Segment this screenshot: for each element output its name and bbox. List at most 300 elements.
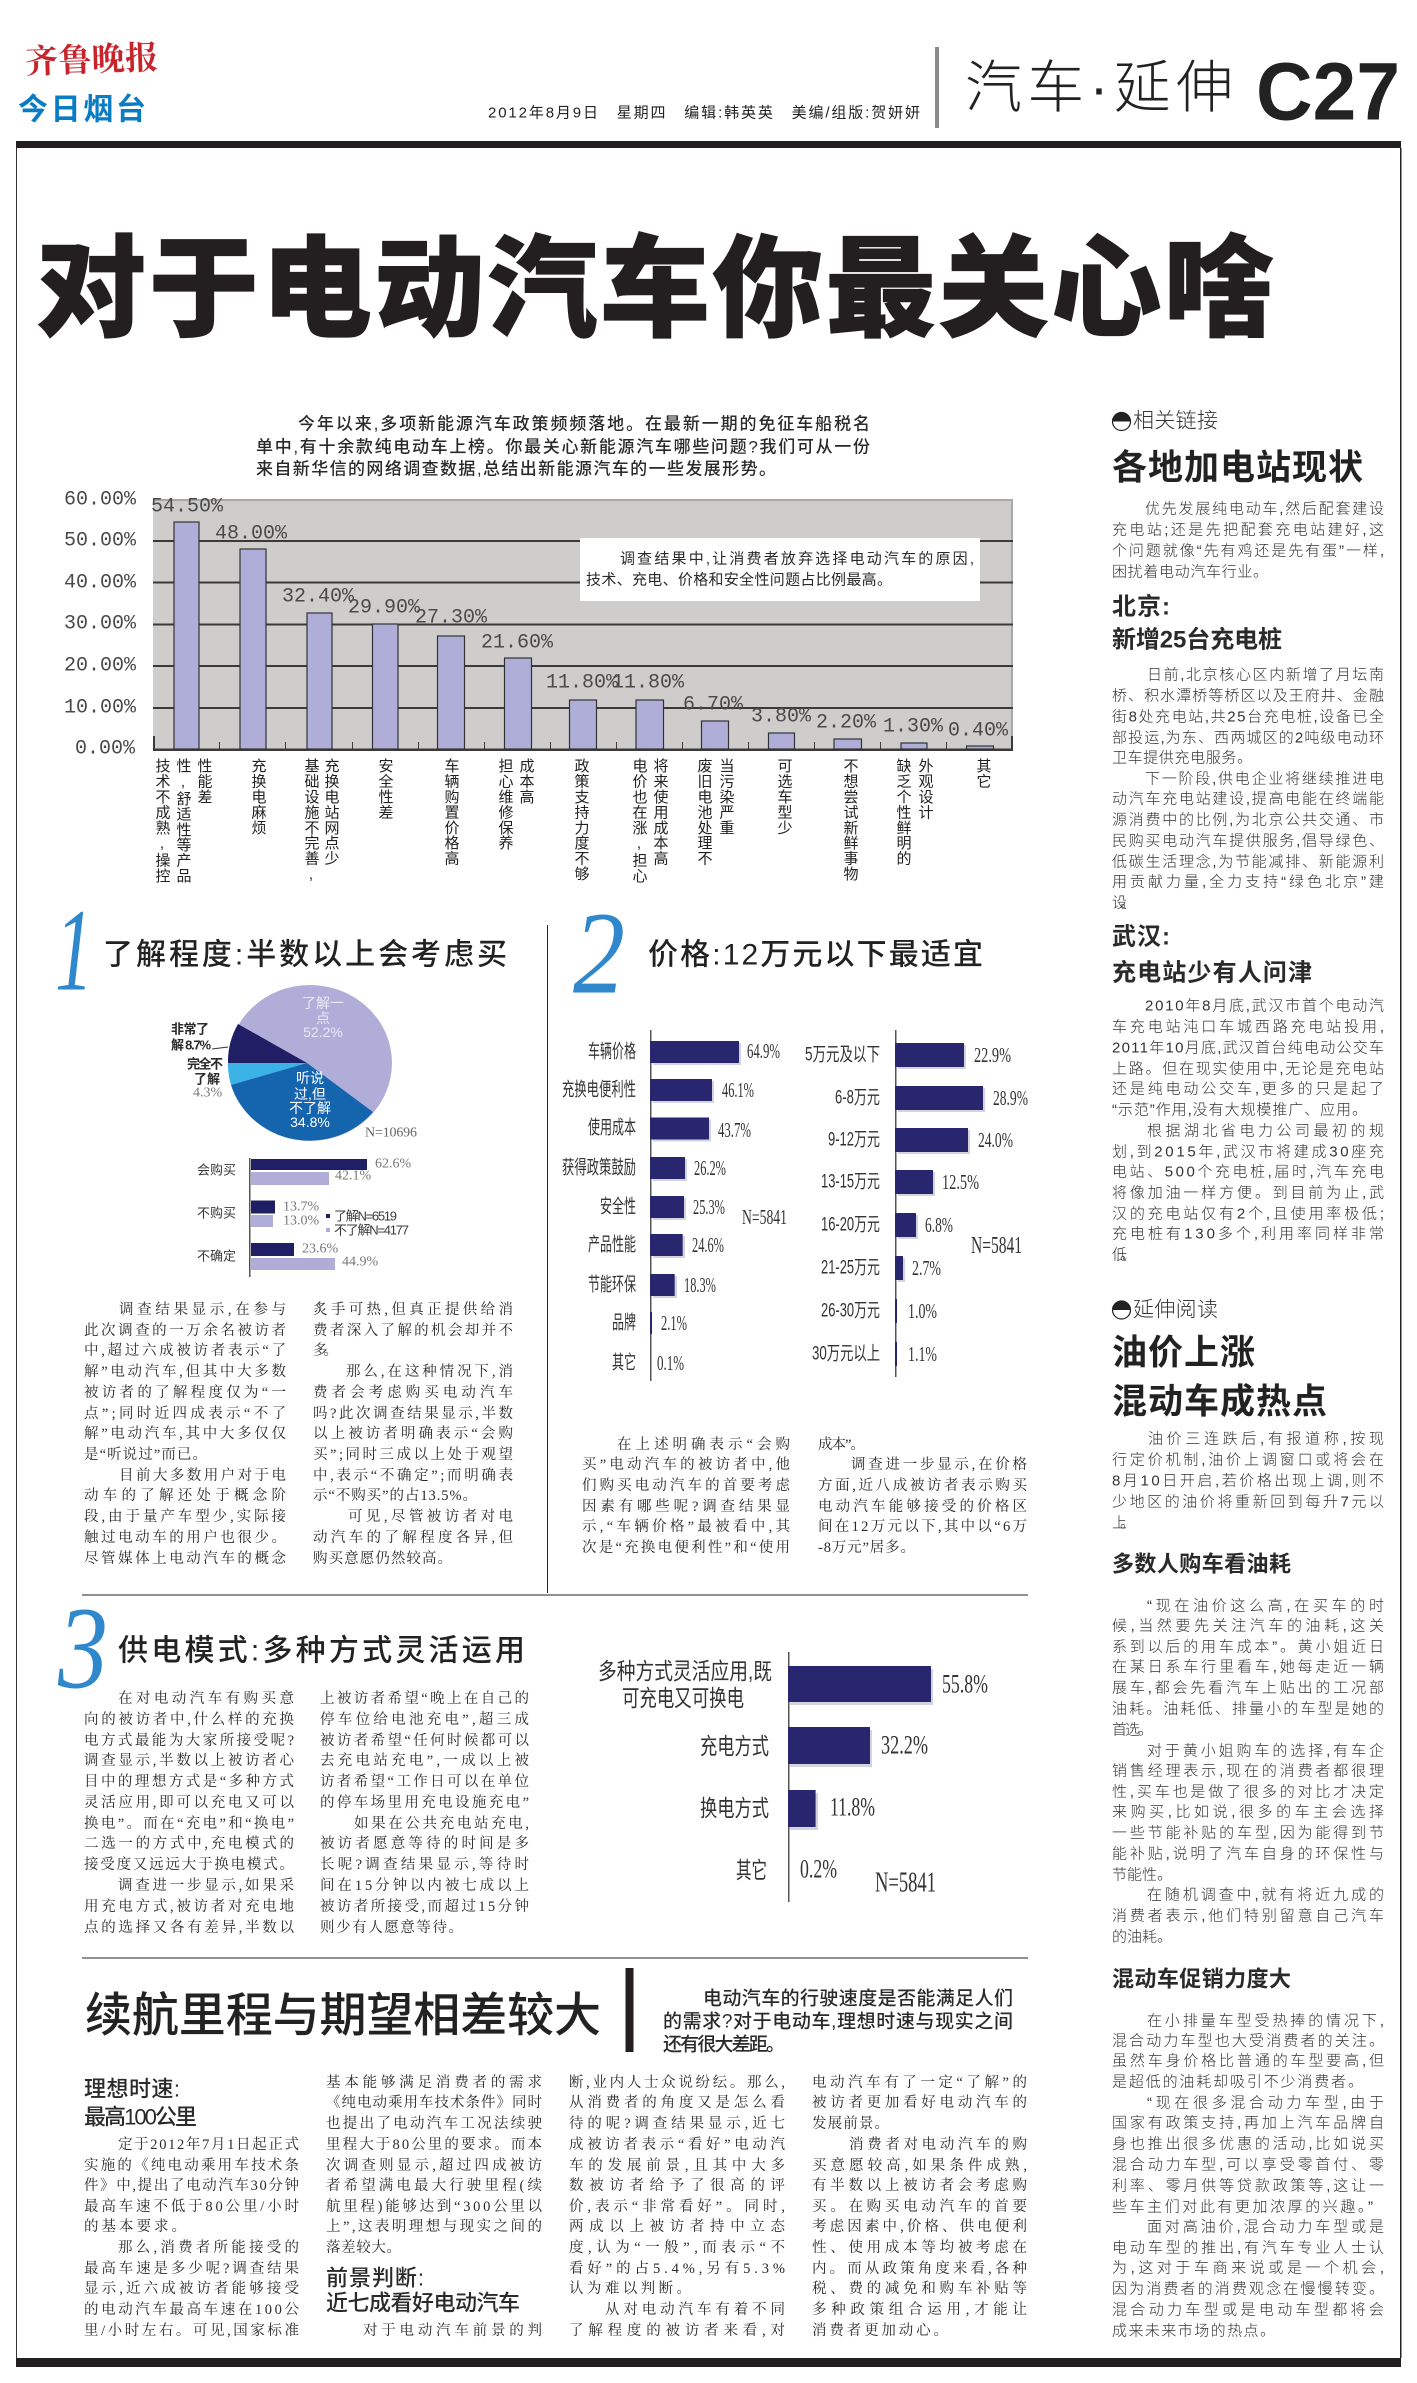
fuel consumption text: 展车,都会先看汽车上贴出的工况部 <box>1112 1680 1384 1696</box>
y axis labels: 30.00% <box>64 612 137 636</box>
body text column 2: 则少有人愿意等待。 <box>320 1918 463 1936</box>
body text column 1: 被访者的了解程度仅为“一 <box>84 1383 286 1401</box>
bar chart: purchase factors: 使用成本 <box>588 1116 636 1138</box>
fuel consumption text: 油耗。油耗低、排量小的车型是她的 <box>1112 1700 1384 1718</box>
hybrid promotion text: 混合动力车型或是电动车型都将会 <box>1112 2302 1384 2318</box>
vertical category labels: 外观设计 <box>916 758 934 820</box>
body text column 1: 调查进一步显示,如果采 <box>118 1877 294 1894</box>
y axis labels <box>64 488 137 760</box>
body text column 2: 被访者愿意等待的时间是多 <box>320 1834 529 1852</box>
main title: 对于电动汽车你最关心啥 <box>36 228 1274 352</box>
chart callout: 调查结果中,让消费者放弃选择电动汽车的原因, <box>620 550 974 568</box>
date and editors: 2012年8月9日 星期四 编辑:韩英英 美编/组版:贺妍妍 <box>488 104 920 122</box>
body text column 3: 成被访者表示“看好”电动汽 <box>569 2135 786 2153</box>
bar chart: purchase factors: 其它 <box>612 1352 636 1374</box>
edition name: 今日烟台 <box>18 92 146 126</box>
body text column 2: 多。 <box>313 1342 338 1359</box>
body text column 2: 前景判断: <box>326 2266 424 2290</box>
pie chart: 过,但 <box>294 1086 326 1102</box>
hybrid promotion text: 电动车型的推出,有汽车专业人士认 <box>1112 2240 1384 2256</box>
bar chart: purchase factors: 18.3% <box>684 1273 716 1297</box>
body text column 4: 性、使用成本等均被考虑在 <box>812 2239 1027 2256</box>
panel: section 3 charging mode <box>57 1582 988 1936</box>
Wuhan text: 将像加油一样方便。到目前为止,武 <box>1112 1184 1384 1202</box>
newspaper logo: 齐鲁晚报 <box>24 40 159 81</box>
bar chart: reasons for giving up electric cars <box>64 488 1013 884</box>
Beijing text: 民购买电动汽车提供服务,倡导绿色、 <box>1112 832 1384 850</box>
subheading: Wuhan: 武汉: <box>1112 924 1170 950</box>
bar chart: acceptable price ranges: N=5841 <box>971 1233 1022 1259</box>
body text column 1: 是“听说过”而已。 <box>84 1446 207 1463</box>
bar chart: charging modes: 换电方式 <box>700 1795 769 1821</box>
intro paragraph: 行定价机制,油价上调窗口或将会在 <box>1112 1452 1384 1468</box>
body text column 2: 购买意愿仍然较高。 <box>313 1549 452 1567</box>
body text column 2: 成本”。 <box>818 1436 865 1453</box>
body text column 4: 有半数以上被访者会考虑购 <box>812 2176 1028 2194</box>
pie chart: 4.3% <box>193 1086 222 1100</box>
body text column 2: 去充电站充电”,一成以上被 <box>320 1751 530 1769</box>
body text column 4: 买。在购买电动汽车的首要 <box>812 2197 1028 2215</box>
fuel consumption text: 首选。 <box>1112 1722 1153 1738</box>
hybrid promotion text: 混合动力车型,可以享受零首付、零 <box>1112 2156 1384 2174</box>
pie chart: 听说 <box>296 1070 324 1086</box>
Beijing text: 街8处充电站,共25台充电桩,设备已全 <box>1112 708 1384 726</box>
vertical category labels: 缺乏个性鲜明的 <box>894 758 912 867</box>
bar chart: charging modes: N=5841 <box>875 1868 936 1898</box>
body text column 2: 可见,尽管被访者对电 <box>348 1507 514 1525</box>
fuel consumption text: 一些节能补贴的车型,因为能得到节 <box>1112 1824 1384 1842</box>
body text column 2: 被访者希望“任何时候都可以 <box>320 1731 530 1749</box>
bar chart: purchase factors: N=5841 <box>742 1205 787 1229</box>
hybrid promotion text: 虽然车身价格比普通的车型要高,但 <box>1112 2052 1384 2070</box>
Wuhan text: 车充电站沌口车城西路充电站投用, <box>1112 1018 1384 1036</box>
bar chart: purchase factors: 获得政策鼓励 <box>562 1156 636 1178</box>
fuel consumption text <box>1112 1598 1384 1946</box>
buying intention bars: 13.7% <box>283 1200 320 1214</box>
Wuhan text: 2010年8月底,武汉市首个电动汽 <box>1145 998 1384 1014</box>
hybrid promotion text: 些车主们对此有更加浓厚的兴趣。” <box>1112 2198 1373 2216</box>
buying intention bars: 会购买 <box>197 1162 236 1178</box>
bar chart: acceptable price ranges: 22.9% <box>974 1043 1011 1067</box>
body text column 4 <box>812 2073 1028 2339</box>
Wuhan text: 划,到2015年,武汉市将建成30座充 <box>1112 1144 1384 1160</box>
subheading: Wuhan: 充电站少有人问津 <box>1112 960 1312 986</box>
hybrid promotion text: 混合动力车型也大受消费者的关注。 <box>1112 2032 1384 2050</box>
pie chart: 34.8% <box>290 1114 330 1130</box>
Wuhan text: 还是纯电动公交车,更多的只是起了 <box>1112 1080 1384 1098</box>
pie chart: 52.2% <box>303 1024 343 1040</box>
body text column 3: 认为难以判断。 <box>569 2280 691 2297</box>
buying intention bars: 不确定 <box>197 1248 236 1264</box>
bar chart: charging modes: 其它 <box>736 1857 767 1883</box>
value labels: 1.30% <box>883 716 944 738</box>
bar chart: charging modes: 0.2% <box>800 1854 837 1884</box>
bar chart: purchase factors <box>562 1030 787 1381</box>
intro paragraph: 油价三连跌后,有报道称,按现 <box>1148 1430 1384 1448</box>
body text column 3: 两成以上被访者持中立态 <box>569 2217 786 2235</box>
chart callout <box>580 538 980 601</box>
vertical category labels: 当污染严重 <box>718 758 734 835</box>
subheading: ideal speed: 理想时速: <box>84 2076 180 2102</box>
value labels: 27.30% <box>415 606 488 630</box>
intro paragraph <box>1112 500 1384 580</box>
body text column 4: 税、费的减免和购车补贴等 <box>812 2279 1027 2297</box>
body text column 3: 断,业内人士众说纷纭。那么, <box>569 2074 785 2091</box>
heading: 各地加电站现状 <box>1112 448 1363 488</box>
bar chart: purchase factors: 26.2% <box>694 1156 726 1180</box>
vertical category labels: 电价也在涨,担心 <box>630 758 648 883</box>
heading: 混动车成热点 <box>1112 1382 1327 1422</box>
bar chart: acceptable price ranges: 21-25万元 <box>821 1258 880 1278</box>
body text column 1: 接受度又远远大于换电模式。 <box>84 1855 294 1873</box>
body text column 3: 车的发展前景,且其中大多 <box>569 2157 785 2174</box>
Wuhan text: 充电桩有130多个,利用率同样非常 <box>1112 1226 1384 1242</box>
y axis labels: 60.00% <box>64 488 137 512</box>
body text column 1: 灵活应用,即可以充电又可以 <box>84 1793 294 1811</box>
y axis labels: 10.00% <box>64 696 137 720</box>
tag: 延伸阅读 <box>1133 1298 1218 1322</box>
body text column 2: 者希望满电最大行驶里程(续 <box>326 2176 542 2194</box>
body text column 2 <box>818 1436 1028 1556</box>
bar chart: purchase factors: 43.7% <box>718 1118 751 1142</box>
body text column 2: 费者会考虑购买电动汽车 <box>313 1383 513 1401</box>
body text column 2: 长呢?调查结果显示,等待时 <box>320 1855 530 1873</box>
Beijing text <box>1112 666 1384 912</box>
bar chart: purchase factors: 品牌 <box>612 1312 636 1334</box>
pie chart: 非常了 <box>171 1022 209 1036</box>
vertical category labels: 性能差 <box>196 758 212 804</box>
Beijing text: 卫车提供充电服务。 <box>1112 750 1252 766</box>
hybrid promotion text: 成来未来市场的热点。 <box>1112 2322 1275 2340</box>
heading: 了解程度:半数以上会考虑买 <box>103 938 507 972</box>
tag: 相关链接 <box>1133 410 1218 432</box>
divider <box>82 1594 1028 1596</box>
body text column 3: 价,表示“非常看好”。同时, <box>569 2197 785 2215</box>
intro text: 来自新华信的网络调查数据,总结出新能源汽车的一些发展形势。 <box>256 458 776 478</box>
pie chart: 点 <box>316 1010 330 1026</box>
body text column 4: 消费者更加动心。 <box>812 2321 948 2339</box>
body text column 2: 费者深入了解的机会却并不 <box>313 1321 514 1339</box>
panel: section 2 price <box>562 888 1028 1556</box>
value labels: 21.60% <box>481 632 554 654</box>
buying intention bars: 44.9% <box>342 1254 378 1270</box>
body text column 2: 调查进一步显示,在价格 <box>851 1455 1028 1473</box>
body text column 1: 电方式最能为大家所接受呢? <box>84 1731 294 1749</box>
Wuhan text <box>1112 998 1384 1264</box>
bar chart: purchase factors: 产品性能 <box>588 1234 636 1256</box>
panel: driving range <box>84 1968 1028 2339</box>
page number: C27 <box>1256 46 1400 138</box>
body text column 1: 次是“充换电便利性”和“使用 <box>582 1538 790 1556</box>
bar chart: acceptable price ranges: 24.0% <box>978 1128 1013 1152</box>
vertical category labels: 基础设施不完善, <box>302 758 320 883</box>
subheading: Beijing: 北京: <box>1112 594 1170 620</box>
body text column 1: 调查结果显示,在参与 <box>119 1301 286 1318</box>
icon: half circle <box>1112 1301 1130 1319</box>
bar chart: charging modes: 55.8% <box>942 1670 988 1698</box>
buying intention bars <box>197 1156 412 1277</box>
body text column 2: 上被访者希望“晚上在自己的 <box>320 1689 529 1707</box>
y axis labels: 40.00% <box>64 572 137 594</box>
body text column 1: 点的选择又各有差异,半数以 <box>84 1918 294 1936</box>
body text column 1 <box>84 1301 286 1567</box>
intro paragraph: 8月10日开启,若价格出现上调,则不 <box>1112 1472 1384 1490</box>
body text column 1: 实施的《纯电动乘用车技术条 <box>84 2156 299 2174</box>
body text column 1: 段,由于量产车型少,实际接 <box>84 1507 286 1525</box>
intro paragraph: 优先发展纯电动车,然后配套建设 <box>1145 500 1384 518</box>
body text column 1: 二选一的方式中,充电模式的 <box>84 1834 294 1852</box>
buying intention bars: 23.6% <box>302 1242 338 1256</box>
vertical category labels <box>154 758 992 884</box>
fuel consumption text: 性,买车也是做了很多的对比才决定 <box>1112 1784 1384 1800</box>
body text column 2: 吗?此次调查结果显示,半数 <box>313 1405 514 1422</box>
vertical category labels: 不想尝试新鲜事物 <box>842 758 858 882</box>
body text column 3: 从对电动汽车有着不同 <box>605 2300 785 2318</box>
fuel consumption text: 的油耗。 <box>1112 1928 1172 1946</box>
bar chart: purchase factors: 0.1% <box>657 1351 684 1375</box>
y axis labels: 50.00% <box>64 530 137 552</box>
vertical category labels: 性,舒适性等产品 <box>174 758 192 883</box>
intro paragraph: 充电站;还是先把配套充电站建好,这 <box>1112 522 1384 538</box>
numeral 3: 3 <box>57 1582 108 1714</box>
pie chart: 不了解 <box>289 1100 331 1116</box>
Beijing text: 用贡献力量,全力支持“绿色北京”建 <box>1112 874 1384 890</box>
bar chart: charging modes: 多种方式灵活应用,既 <box>598 1658 772 1684</box>
body text column 4: 考虑因素中,价格、供电便利 <box>812 2217 1027 2235</box>
pie chart: 了解 <box>194 1072 220 1086</box>
divider <box>82 1958 1028 1959</box>
hybrid promotion text: 面对高油价,混合动力车型或是 <box>1147 2218 1384 2236</box>
bar chart: acceptable price ranges: 1.0% <box>908 1299 937 1323</box>
bar chart: acceptable price ranges: 30万元以上 <box>812 1342 880 1364</box>
subheading: fuel consumption: 多数人购车看油耗 <box>1112 1552 1291 1576</box>
intro paragraph: 困扰着电动汽车行业。 <box>1112 564 1268 580</box>
bar chart: purchase factors: 安全性 <box>600 1196 636 1218</box>
body text column 3: 了解程度的被访者来看,对 <box>569 2321 785 2339</box>
subheading: Beijing <box>1112 594 1282 654</box>
body text column 2: 动汽车的了解程度各异,但 <box>313 1528 514 1546</box>
value labels: 0.40% <box>948 720 1009 742</box>
body text column 2: 停车位给电池充电”,超三成 <box>320 1710 529 1728</box>
body text column 1: 显示,近六成被访者能够接受 <box>84 2279 300 2297</box>
Wuhan text: 电站、500个充电桩,届时,汽车充电 <box>1112 1164 1384 1180</box>
hybrid promotion text: 国家有政策支持,再加上汽车品牌自 <box>1112 2114 1384 2132</box>
bar chart: acceptable price ranges: 13-15万元 <box>821 1172 880 1192</box>
heavy divider <box>626 1968 634 2052</box>
Wuhan text: 上路。但在现实使用中,无论是充电站 <box>1112 1060 1384 1078</box>
intro text: 单中,有十余款纯电动车上榜。你最关心新能源汽车哪些问题?我们可从一份 <box>256 436 870 456</box>
heading: 供电模式:多种方式灵活运用 <box>118 1634 525 1668</box>
heading <box>1112 1334 1327 1422</box>
body text column 2: 如果在公共充电站充电, <box>354 1814 529 1832</box>
Wuhan text: 2011年10月底,武汉首台纯电动公交车 <box>1112 1040 1384 1056</box>
y axis labels: 20.00% <box>64 654 137 678</box>
hybrid promotion text: “现在很多混合动力车型,由于 <box>1147 2094 1384 2112</box>
fuel consumption text: 消费者表示,他们特别留意自己汽车 <box>1112 1908 1384 1924</box>
bar chart: charging modes: 32.2% <box>881 1730 928 1760</box>
bar chart: charging modes: 可充电又可换电 <box>622 1685 744 1711</box>
Beijing text: 桥、积水潭桥等桥区以及王府井、金融 <box>1112 688 1384 704</box>
body text column 1: 的电动汽车最高车速在100公 <box>84 2300 300 2318</box>
bar chart: purchase factors: 64.9% <box>747 1039 780 1063</box>
body text column 1: 在对电动汽车有购买意 <box>118 1689 294 1707</box>
body text column 2: 访者希望“工作日可以在单位 <box>320 1772 530 1790</box>
body text column 2: 也提出了电动汽车工况法续驶 <box>326 2114 542 2132</box>
body text column 1: 那么,消费者所能接受的 <box>118 2238 299 2256</box>
body text column 1 <box>582 1435 792 1556</box>
hybrid promotion text: 利率、零月供等贷款政策等,这让一 <box>1112 2176 1384 2194</box>
body text column 1: 尽管媒体上电动汽车的概念 <box>84 1549 286 1567</box>
fuel consumption text: 对于黄小姐购车的选择,有车企 <box>1147 1742 1384 1760</box>
body text column 1: 向的被访者中,什么样的充换 <box>84 1710 294 1728</box>
vertical category labels: 安全性差 <box>376 758 394 820</box>
value labels: 48.00% <box>215 522 288 546</box>
bar chart: acceptable price ranges: 5万元及以下 <box>805 1044 880 1066</box>
intro text <box>256 414 870 478</box>
Wuhan text: 根据湖北省电力公司最初的规 <box>1147 1122 1384 1140</box>
bar chart: acceptable price ranges: 28.9% <box>993 1086 1028 1110</box>
body text column 3: 看好”的占5.4%,另有5.3% <box>569 2260 785 2277</box>
fuel consumption text: “现在油价这么高,在买车的时 <box>1147 1598 1384 1614</box>
Wuhan text: 汉的充电站仅有2个,且使用率极低; <box>1112 1206 1384 1222</box>
body text column 2: 方面,近八成被访者表示购买 <box>818 1476 1028 1494</box>
bar chart: acceptable price ranges: 1.1% <box>908 1342 937 1366</box>
body text column 1 <box>84 2135 300 2339</box>
bar chart: acceptable price ranges: 12.5% <box>942 1170 979 1194</box>
vertical category labels: 车辆购置价格高 <box>442 758 460 866</box>
vertical category labels: 技术不成熟,操控 <box>154 758 170 884</box>
intro paragraph: 少地区的油价将重新回到每升7元以 <box>1112 1494 1384 1510</box>
value labels: 6.70% <box>683 694 744 716</box>
vertical category labels: 充换电麻烦 <box>250 758 266 835</box>
bar chart: purchase factors: 24.6% <box>692 1233 724 1257</box>
fuel consumption text: 候,当然要先关注汽车的油耗,这关 <box>1112 1618 1384 1634</box>
body text column 1: 目前大多数用户对于电 <box>119 1466 286 1484</box>
value labels: 11.80% <box>546 672 619 694</box>
body text column 1: 动车的了解还处于概念阶 <box>84 1486 286 1504</box>
body text column 1: 示,“车辆价格”最被看中,其 <box>582 1517 792 1535</box>
body text column 2: 被访者所接受,而超过15分钟 <box>320 1897 529 1915</box>
intro text: 今年以来,多项新能源汽车政策频频落地。在最新一期的免征车船税名 <box>298 414 870 434</box>
body text column 2: 炙手可热,但真正提供给消 <box>313 1300 513 1318</box>
subheading: ideal speed: 最高100公里 <box>84 2104 197 2130</box>
buying intention bars: 42.1% <box>335 1168 372 1184</box>
body text column 2 <box>313 1300 514 1567</box>
value labels: 11.80% <box>612 672 685 694</box>
hybrid promotion text: 在小排量车型受热捧的情况下, <box>1147 2012 1384 2030</box>
Beijing text: 设。 <box>1112 894 1135 912</box>
heading: 油价上涨 <box>1112 1334 1255 1372</box>
value labels: 54.50% <box>151 496 224 518</box>
fuel consumption text: 销售经理表示,现在的消费者都很理 <box>1112 1762 1384 1780</box>
bar chart: purchase factors: 充换电便利性 <box>562 1078 636 1100</box>
intro paragraph: 个问题就像“先有鸡还是先有蛋”一样, <box>1112 542 1384 560</box>
icon: half circle <box>1112 412 1130 430</box>
Beijing text: 动汽车充电站建设,提高电能在终端能 <box>1112 790 1384 808</box>
body text column 1: 里/小时左右。可见,国家标准 <box>84 2322 300 2339</box>
lead text: 还有很大差距。 <box>663 2034 785 2056</box>
bar chart: purchase factors: 46.1% <box>722 1078 754 1102</box>
bar chart: purchase factors: 车辆价格 <box>588 1040 636 1062</box>
body text column 2: 以上被访者明确表示“会购 <box>313 1424 514 1442</box>
body text column 1 <box>84 1689 294 1936</box>
body text column 2: 落差较大。 <box>326 2238 401 2256</box>
value labels: 32.40% <box>282 586 355 608</box>
body text column 1: 件》中,提出了电动汽车30分钟 <box>84 2176 299 2194</box>
column divider <box>547 925 548 1593</box>
value labels: 2.20% <box>816 712 877 734</box>
hybrid promotion text: 为,这对于车商来说或是一个机会, <box>1112 2260 1384 2276</box>
body text column 2: 买”;同时三成以上处于观望 <box>313 1445 513 1463</box>
body text column 3 <box>569 2074 786 2339</box>
subheading: ideal speed <box>84 2076 197 2130</box>
body text column 2: 航里程)能够达到“300公里以 <box>326 2198 542 2215</box>
fuel consumption text: 在随机调查中,就有将近九成的 <box>1147 1886 1384 1904</box>
lead text: 的需求?对于电动车,理想时速与现实之间 <box>663 2010 1013 2032</box>
bar chart: acceptable price ranges: 6-8万元 <box>835 1088 880 1108</box>
Beijing text: 源消费中的比例,为北京公共交通、市 <box>1112 812 1384 828</box>
hybrid promotion text: 因为消费者的消费观念在慢慢转变。 <box>1112 2280 1384 2298</box>
masthead divider <box>935 47 939 128</box>
Beijing text: 部投运,为东、西两城区的2吨级电动环 <box>1112 730 1384 746</box>
body text column 2: 间在12万元以下,其中以“6万 <box>818 1518 1027 1535</box>
vertical category labels: 将来使用成本高 <box>652 758 668 866</box>
fuel consumption text: 来购买,比如说,很多的车主会选择 <box>1112 1804 1384 1820</box>
heading: 价格:12万元以下最适宜 <box>648 938 983 972</box>
body text column 4: 被访者更加看好电动汽车的 <box>812 2093 1027 2111</box>
heading: 续航里程与期望相差较大 <box>85 1988 601 2042</box>
bar chart: purchase factors: 2.1% <box>661 1311 687 1335</box>
body text column 2: 间在15分钟以内被七成以上 <box>320 1877 529 1894</box>
body text column 4: 多种政策组合运用,才能让 <box>812 2301 1027 2318</box>
body text column 2: -8万元”居多。 <box>818 1539 915 1556</box>
Beijing text: 低碳生活理念,为节能减排、新能源利 <box>1112 852 1384 870</box>
body text column 2: 对于电动汽车前景的判 <box>363 2321 542 2339</box>
Wuhan text: 低。 <box>1112 1246 1135 1264</box>
value labels: 3.80% <box>751 706 812 728</box>
vertical category labels: 成本高 <box>518 758 534 804</box>
buying intention bars: 13.0% <box>283 1214 320 1228</box>
hybrid promotion text: 是超低的油耗却吸引不少消费者。 <box>1112 2074 1363 2090</box>
chart callout: 技术、充电、价格和安全性问题占比例最高。 <box>586 570 892 588</box>
body text column 1: 的基本要求。 <box>84 2217 186 2235</box>
body text column 1: 在上述明确表示“会购 <box>617 1435 790 1453</box>
subheading: Wuhan <box>1112 924 1312 986</box>
panel: sidebar extended reading <box>1112 1298 1384 2340</box>
bars <box>174 522 994 749</box>
body text column 1: 中,超过六成被访者表示“了 <box>84 1341 286 1359</box>
body text column 4: 消费者对电动汽车的购 <box>849 2135 1028 2153</box>
section name: 汽车·延伸 <box>965 56 1233 120</box>
buying intention bars: 了解N=6519 <box>334 1208 397 1224</box>
intro paragraph: 上。 <box>1112 1514 1135 1532</box>
body text column 1: 因素有哪些呢?调查结果显 <box>582 1498 790 1515</box>
numeral 1: 1 <box>55 884 93 1016</box>
bar chart: charging modes: 充电方式 <box>700 1733 769 1759</box>
pie chart <box>171 985 417 1141</box>
body text column 2: 《纯电动乘用车技术条件》同时 <box>326 2093 542 2111</box>
body text column 2: 近七成看好电动汽车 <box>326 2290 520 2316</box>
bar chart: charging modes: 11.8% <box>830 1792 875 1822</box>
bar chart: acceptable price ranges: 6.8% <box>925 1213 953 1237</box>
Beijing text: 日前,北京核心区内新增了月坛南 <box>1147 666 1384 684</box>
body text column 1: 触过电动车的用户也很少。 <box>84 1528 286 1546</box>
vertical category labels: 废旧电池处理不 <box>696 758 712 866</box>
intro paragraph <box>1112 1430 1384 1532</box>
body text column 4: 买意愿较高,如果条件成熟, <box>812 2156 1027 2174</box>
value labels <box>151 496 1009 742</box>
body text column 1: 调查显示,半数以上被访者心 <box>84 1751 294 1769</box>
